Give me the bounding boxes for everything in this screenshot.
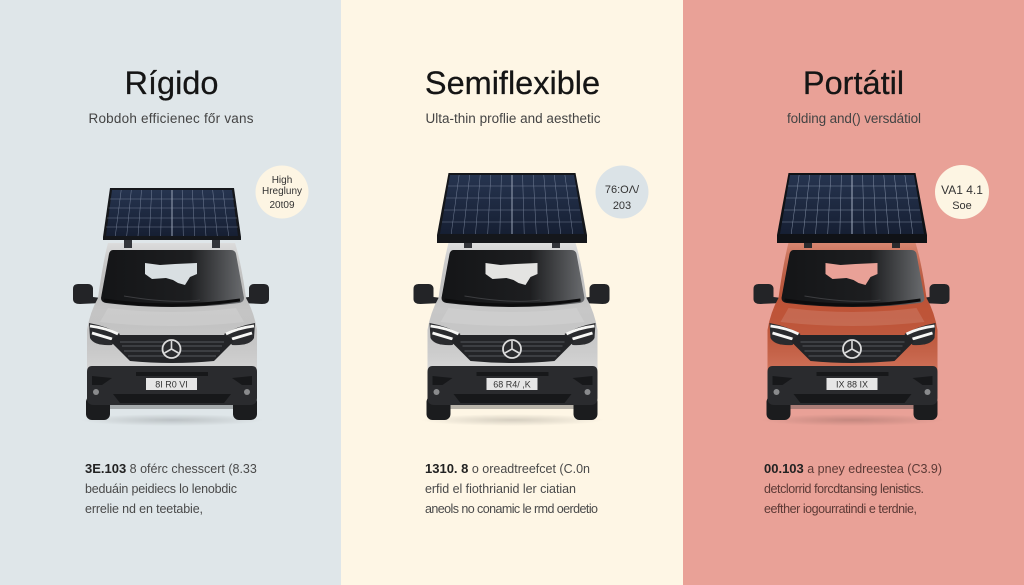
panel: Rígido background [0, 0, 341, 585]
illustration: solar panel [437, 173, 587, 248]
panel: Semiflexible background [341, 0, 683, 585]
badge: rating: 203 [613, 200, 631, 212]
illustration: silver van: 8I R0 VI [155, 380, 188, 390]
column: Portátil [754, 65, 989, 516]
illustration: silver van [73, 243, 269, 426]
text block: Semiflexible details: aneols no conamic le rmd oerdetio [425, 502, 598, 516]
text block: Rígido details: 3E.103 [85, 461, 126, 476]
illustration: orange van [754, 243, 950, 426]
heading: Semiflexible: Semiflexible [425, 65, 600, 101]
text block: Semiflexible details: o oreadtreefcet (C.0n [468, 462, 590, 476]
heading: Portátil: Portátil [803, 65, 904, 101]
text block: Rígido details: beduáin peidiecs lo lenobdic [85, 482, 237, 496]
illustration: silver van [414, 243, 610, 426]
heading: Rígido: Rígido [125, 65, 218, 101]
text block: Semiflexible details: 1310. 8 [425, 461, 468, 476]
badge: high efficiency [256, 166, 308, 218]
illustration: silver van: 68 R4/ ,K [493, 380, 531, 390]
illustration: solar panel [777, 173, 927, 248]
column: Semiflexible [414, 65, 648, 516]
text block: Semiflexible details: erfid el fiothrianid ler ciatian [425, 482, 576, 496]
column: Rígido [73, 65, 308, 516]
text block: Rígido details: 8 oférc chesscert (8.33 [126, 462, 257, 476]
badge: rating: VA1 4.1 [941, 183, 983, 197]
panel: Portátil background [683, 0, 1024, 585]
subtitle: Semiflexible: Ulta-thin proflie and aesthetic [426, 111, 601, 126]
badge: high efficiency: 20t09 [269, 200, 295, 211]
text block: Rígido details: errelie nd en teetabie, [85, 502, 203, 516]
illustration: orange van: IX 88 IX [836, 380, 868, 390]
text block: Portátil details: detclorrid forcdtansing lenistics. [764, 482, 924, 496]
badge: rating: 76:OΛ/ [605, 184, 640, 196]
subtitle: Rígido: Robdoh efficienec főr vans [88, 111, 254, 126]
text block: Portátil details: eefther iogourratindi e terdnie, [764, 502, 917, 516]
badge: rating: Soe [952, 200, 972, 212]
badge: rating [596, 166, 648, 218]
text block: Portátil details: a pney edreestea (C3.9) [804, 462, 942, 476]
illustration: solar panel [103, 188, 241, 248]
text block: Portátil details: 00.103 [764, 461, 804, 476]
subtitle: Portátil: folding and() versdátiol [787, 111, 921, 126]
badge: high efficiency: High [272, 175, 292, 186]
badge: rating [935, 165, 989, 219]
badge: high efficiency: Hregluny [262, 186, 302, 197]
